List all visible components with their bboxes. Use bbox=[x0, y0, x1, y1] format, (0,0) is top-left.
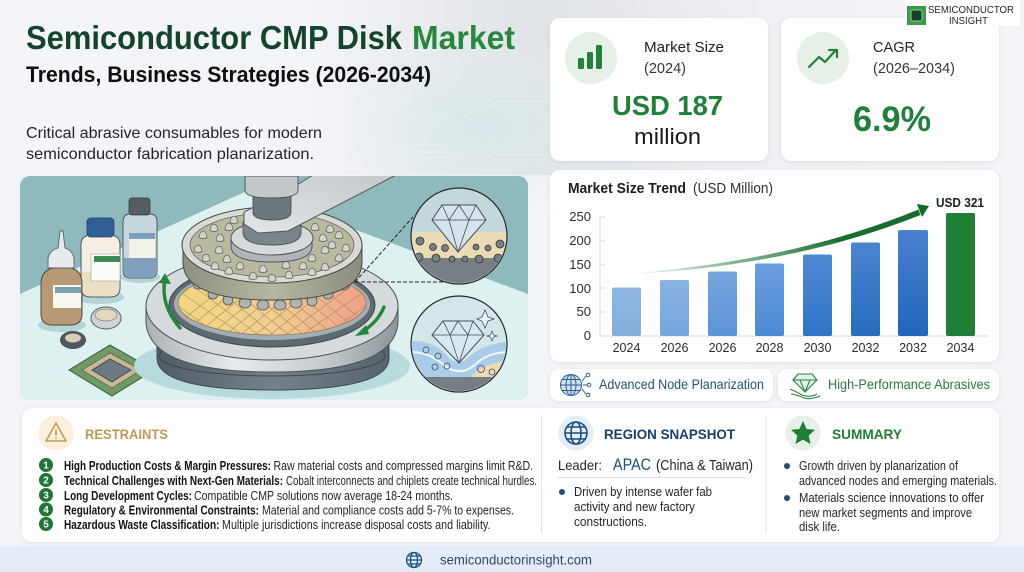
x axis labels: 2032 bbox=[899, 341, 927, 355]
title: Market bbox=[412, 19, 515, 56]
tag: advanced node planarization bbox=[550, 369, 773, 401]
summary bullet text: Materials science innovations to offer bbox=[799, 490, 985, 505]
region bullet text bbox=[559, 484, 712, 529]
icon: footer globe bbox=[406, 552, 422, 568]
x axis labels: 2032 bbox=[852, 341, 879, 355]
x axis labels: 2028 bbox=[756, 341, 783, 355]
conditioning disk bbox=[182, 207, 362, 310]
y axis bbox=[569, 209, 988, 343]
list: restraint items: Material and compliance costs add 5-7% to expenses. bbox=[262, 504, 514, 518]
description: semiconductor fabrication planarization. bbox=[26, 146, 314, 163]
subtitle: Trends, Business Strategies (2026-2034) bbox=[26, 62, 431, 87]
x axis labels: 2024 bbox=[613, 341, 640, 355]
tag: high-performance abrasives: High-Performance Abrasives bbox=[828, 376, 990, 392]
icon: warning triangle bbox=[38, 416, 74, 450]
summary bullet text: Growth driven by planarization of bbox=[799, 458, 958, 473]
x axis labels: 2030 bbox=[804, 341, 831, 355]
icon: processor chip bbox=[69, 345, 154, 396]
heading: restraints: RESTRAINTS bbox=[85, 426, 168, 442]
list: restraint items: High Production Costs & Margin Pressures: bbox=[64, 459, 271, 473]
chart title: (USD Million) bbox=[693, 181, 773, 197]
summary bullet text bbox=[784, 458, 997, 534]
list: restraint items: Raw material costs and compressed margins limit R&D. bbox=[274, 459, 533, 473]
icon: globe with nodes bbox=[560, 373, 591, 397]
list: restraint items: 2 bbox=[43, 476, 49, 486]
bars bbox=[612, 213, 975, 336]
list: restraint items: 1 bbox=[43, 460, 49, 472]
x axis labels bbox=[613, 341, 974, 355]
region bullet text: constructions. bbox=[574, 514, 647, 529]
list: restraint items: 3 bbox=[43, 490, 49, 502]
list: restraint items: Hazardous Waste Classification: bbox=[64, 518, 220, 532]
y axis: 50 bbox=[577, 304, 591, 319]
chart title bbox=[568, 181, 773, 197]
arrow: growth trend bbox=[628, 204, 929, 274]
panel: summary bbox=[784, 416, 997, 534]
heading: region snapshot: REGION SNAPSHOT bbox=[604, 426, 735, 442]
y axis: 100 bbox=[569, 281, 591, 296]
list: restraint items: Compatible CMP solutions now average 18-24 months. bbox=[194, 489, 453, 503]
description: Critical abrasive consumables for modern bbox=[26, 125, 322, 142]
icon: bottles and consumables bbox=[38, 198, 160, 349]
callout: diamond in pad bbox=[410, 188, 510, 288]
icon: bar chart bbox=[565, 32, 617, 84]
panel: CAGR card: (2026–2034) bbox=[873, 60, 955, 77]
chart title: Market Size Trend bbox=[568, 181, 686, 197]
leader line: APAC bbox=[613, 455, 651, 474]
leader line: Leader: bbox=[558, 457, 602, 473]
y axis: 150 bbox=[569, 257, 591, 272]
list: restraint items: Long Development Cycles: bbox=[64, 489, 192, 503]
tag: advanced node planarization: Advanced Node Planarization bbox=[599, 376, 764, 392]
callout: USD 321: USD 321 bbox=[936, 195, 984, 210]
callout: diamond in slurry bbox=[410, 296, 510, 397]
list: restraint items: Regulatory & Environmental Constraints: bbox=[64, 504, 259, 518]
logo bbox=[905, 0, 1020, 27]
polishing machine bbox=[134, 267, 410, 399]
icon: diamond with waves bbox=[790, 374, 820, 399]
panel: region snapshot bbox=[558, 416, 753, 529]
list: restraint items: Cobalt interconnects and chiplets create technical hurdles. bbox=[286, 474, 537, 488]
list: restraint items: 4 bbox=[43, 505, 49, 516]
list: restraint items bbox=[39, 458, 537, 532]
summary bullet text: disk life. bbox=[799, 519, 840, 534]
dashed callout lines bbox=[355, 217, 448, 282]
icon: star bbox=[786, 416, 820, 450]
logo: SEMICONDUCTOR bbox=[928, 4, 1014, 16]
list: restraint items: Technical Challenges with Next-Gen Materials: bbox=[64, 474, 283, 488]
footer bbox=[0, 546, 1024, 572]
x axis labels: 2034 bbox=[947, 341, 974, 355]
panel: market size card: (2024) bbox=[644, 60, 686, 77]
panel: market size trend chart bbox=[550, 170, 999, 362]
logo: INSIGHT bbox=[949, 15, 989, 27]
y axis: 250 bbox=[569, 209, 591, 224]
heading: summary: SUMMARY bbox=[832, 426, 903, 442]
panel: CMP illustration bbox=[20, 175, 528, 400]
icon: trend line bbox=[797, 32, 849, 84]
panel: CAGR card: 6.9% bbox=[853, 100, 931, 139]
title: Semiconductor CMP Disk bbox=[26, 19, 403, 56]
footer: semiconductorinsight.com bbox=[440, 552, 592, 568]
description bbox=[26, 125, 322, 163]
tag: high-performance abrasives bbox=[778, 369, 999, 401]
leader line bbox=[558, 455, 753, 478]
y axis: 200 bbox=[569, 233, 591, 248]
panel: restraints bbox=[38, 416, 537, 532]
x axis labels: 2026 bbox=[661, 341, 688, 355]
panel: CAGR card bbox=[781, 18, 999, 161]
icon: globe bbox=[558, 416, 594, 450]
list: restraint items: Multiple jurisdictions increase disposal costs and liability. bbox=[222, 518, 490, 532]
region bullet text: Driven by intense wafer fab bbox=[574, 484, 712, 499]
panel: market size card: million bbox=[634, 124, 701, 149]
leader line: (China & Taiwan) bbox=[656, 457, 753, 474]
summary bullet text: new market segments and improve bbox=[799, 505, 972, 520]
panel: market size card: USD 187 bbox=[612, 90, 723, 121]
spindle and arm bbox=[231, 175, 396, 262]
icon: rotation arrows bbox=[159, 273, 384, 336]
y axis: 0 bbox=[584, 328, 591, 343]
panel: market size card bbox=[550, 18, 768, 161]
panel: market size card: Market Size bbox=[644, 39, 724, 56]
region bullet text: activity and new factory bbox=[574, 499, 695, 514]
list: restraint items: 5 bbox=[43, 520, 49, 530]
x axis labels: 2026 bbox=[709, 341, 736, 355]
panel: CAGR card: CAGR bbox=[873, 39, 915, 56]
panel: bottom information bbox=[22, 408, 999, 542]
